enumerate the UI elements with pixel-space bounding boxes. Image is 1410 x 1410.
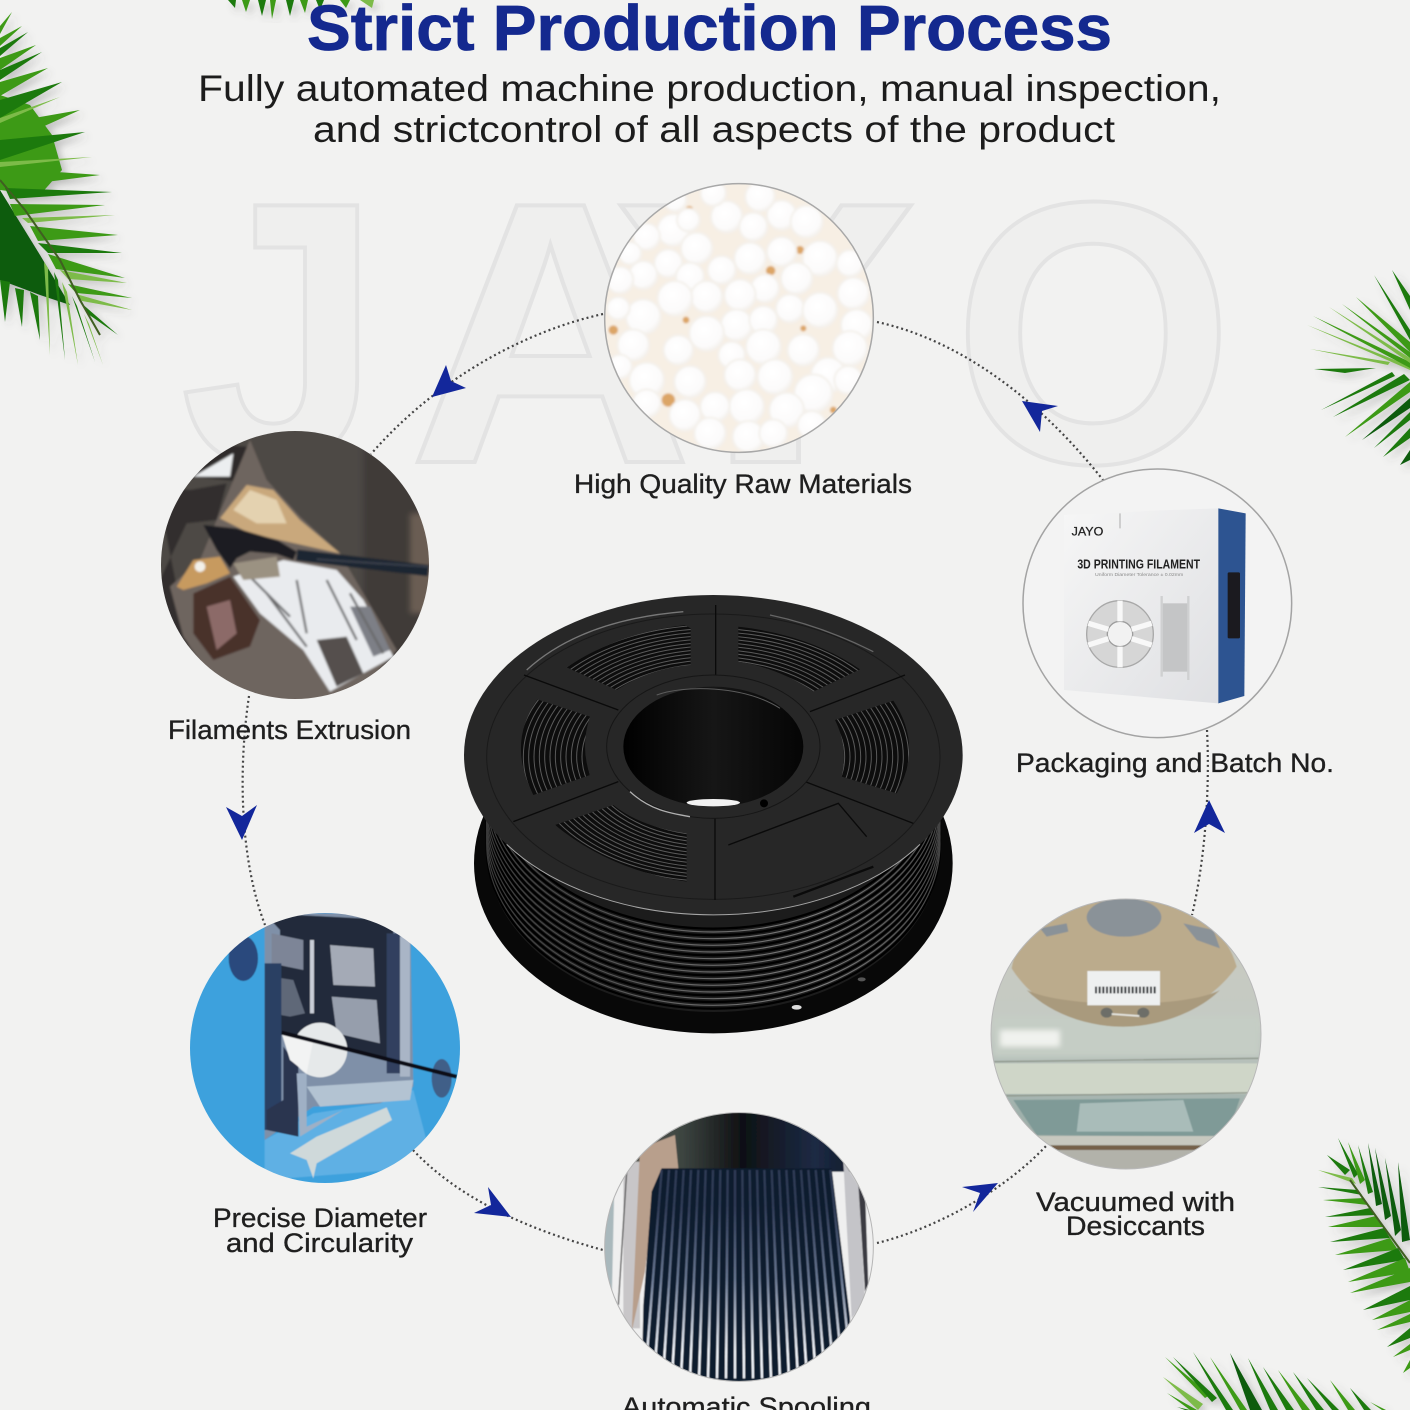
label: precise diameter	[213, 1203, 427, 1258]
subtitle: and strictcontrol of all aspects of the product	[313, 109, 1116, 150]
label: precise diameter: and Circularity	[226, 1228, 414, 1258]
dotted cycle path: raw materials to extrusion	[371, 314, 603, 454]
subtitle: Fully automated machine production, manual inspection,	[198, 68, 1221, 109]
dotted cycle path: spooling to vacuum	[877, 1145, 1047, 1243]
dotted cycle path: vacuum to packaging	[1192, 730, 1208, 915]
subtitle	[198, 68, 1221, 150]
filament spool	[464, 595, 963, 1033]
arrow: towards packaging	[1194, 800, 1225, 833]
palm leaf: lower right	[1318, 1138, 1410, 1373]
watermark: JAYO: A	[408, 125, 693, 542]
palm leaf: top centre	[228, 0, 374, 19]
photo: packaging box: Uniform Diameter Tolerance ± 0.02mm	[1095, 572, 1183, 578]
spool: spokes	[513, 605, 913, 900]
arrow: towards vacuum	[962, 1183, 998, 1212]
palm leaf: right	[1307, 270, 1410, 465]
photo: packaging box: JAYO	[1072, 525, 1103, 538]
label: vacuumed: Desiccants	[1066, 1211, 1205, 1241]
arrow: towards raw materials	[1022, 401, 1058, 432]
photo: packaging box	[1023, 469, 1292, 738]
watermark: JAYO	[180, 125, 1234, 542]
palm leaf: bottom right	[1163, 1352, 1386, 1410]
arrow: towards extrusion	[432, 365, 466, 397]
spool: wound filament	[487, 605, 940, 1012]
label: vacuumed: Vacuumed with	[1036, 1187, 1235, 1217]
photo: packaging box: 3D PRINTING FILAMENT	[1077, 557, 1200, 571]
dotted cycle path: packaging to raw materials	[877, 322, 1103, 480]
spool: filament windows	[521, 625, 909, 882]
label: packaging: Packaging and Batch No.	[1016, 748, 1334, 778]
photo: vacuum sealed with desiccants	[990, 898, 1262, 1170]
photo: raw material pellets	[600, 180, 880, 460]
watermark: JAYO: Y	[613, 125, 918, 542]
label: vacuumed	[1036, 1187, 1235, 1241]
label: precise diameter: Precise Diameter	[213, 1203, 427, 1233]
label: raw materials: High Quality Raw Materials	[574, 469, 912, 499]
spool: bottom flange	[474, 693, 953, 1033]
photo: filament extrusion	[161, 431, 429, 699]
arrow: towards diameter	[226, 805, 257, 840]
watermark: JAYO: O	[953, 125, 1234, 542]
arrow: towards spooling	[474, 1187, 511, 1217]
label: filament extrusion: Filaments Extrusion	[168, 715, 411, 745]
palm leaf: top left	[0, 12, 132, 365]
spool: hub and central hole	[607, 675, 820, 818]
dotted cycle path: diameter to spooling	[413, 1150, 603, 1250]
watermark: JAYO: J	[180, 125, 382, 542]
photo: automatic spooling	[604, 1112, 874, 1382]
photo: diameter and circularity check	[190, 913, 460, 1183]
spool: top flange	[464, 595, 963, 915]
dotted cycle path: extrusion to diameter	[243, 696, 265, 925]
